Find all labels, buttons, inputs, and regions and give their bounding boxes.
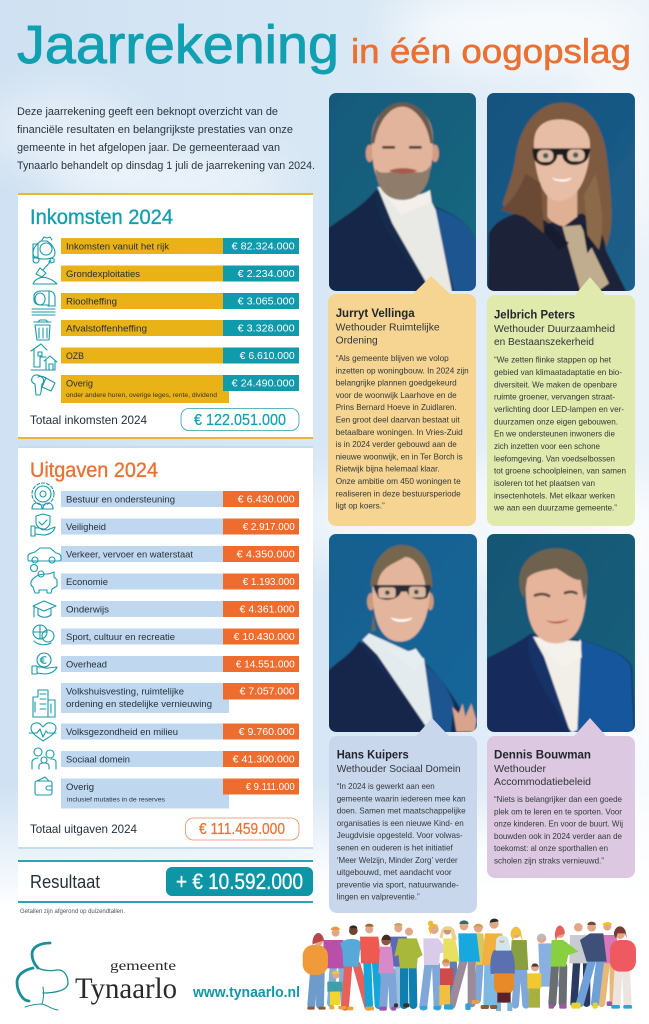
bar: onderwijs: € 4.361.000 (240, 604, 295, 616)
intro text: Tynaarlo behandelt op dinsdag 1 juli de jaarrekening van 2024. (17, 160, 315, 172)
card: Hans Kuipers: ‘Meer Welzijn, Minder Zorg’ verder (337, 855, 458, 865)
total inkomsten: € 122.051.000 (194, 412, 286, 429)
card: Hans Kuipers (329, 718, 477, 913)
bar: economie: € 1.193.000 (243, 577, 295, 588)
title: in één oogopslag (351, 33, 631, 71)
bar: overhead (61, 656, 299, 672)
title (17, 15, 631, 75)
card: Jurryt Vellinga: belangrijke plannen goedgekeurd (336, 378, 457, 388)
card: Hans Kuipers: uitgebouwd, met aandacht voor (337, 867, 452, 877)
icon: shovel (33, 258, 57, 284)
total inkomsten: Totaal inkomsten 2024 (30, 413, 147, 427)
bar: rioolheffing (61, 293, 299, 309)
bar: volksgezondheid (61, 724, 299, 740)
panel: resultaat: Resultaat (30, 872, 100, 892)
icon: apartment buildings (33, 690, 55, 717)
bar: bestuur (61, 491, 299, 507)
bar: ozb: OZB (66, 350, 84, 361)
icon: euro on hand (32, 653, 57, 674)
bar: economie: Economie (66, 576, 108, 587)
bar: volkshuisvesting: ordening en stedelijke vernieuwing (66, 698, 212, 709)
logo: gemeente Tynaarlo (17, 943, 177, 1010)
card: Jurryt Vellinga: Een groot deel daarvan bestaat uit (336, 414, 460, 424)
intro text: gemeente in het afgelopen jaar. De gemeenteraad van (17, 142, 280, 154)
icon: car (28, 548, 61, 563)
icon: keys (32, 375, 55, 395)
bar: sport (61, 628, 299, 644)
photo: Jurryt Vellinga (326, 90, 479, 297)
bar: rioolheffing: € 3.065.000 (238, 296, 295, 308)
card: Jurryt Vellinga: Onze ambitie om 450 woningen te (336, 476, 461, 486)
card: Dennis Bouwman: onze kinderen. En voor de buurt. Wij (494, 819, 623, 829)
bar: veiligheid (61, 518, 299, 534)
card: Jelbrich Peters: Jelbrich Peters (494, 308, 575, 322)
icon: sewer pipe (32, 291, 55, 315)
bar: sociaal domein: € 41.300.000 (233, 754, 295, 766)
bar: grondexploitaties (61, 266, 299, 282)
card: Hans Kuipers: senen en ouderen is het initiatief (337, 842, 453, 852)
bar: ozb: € 6.610.000 (240, 351, 295, 362)
bar: grondexploitaties: Grondexploitaties (66, 268, 140, 279)
card: Jurryt Vellinga: nieuwe woonwijk, en in Ter Borch is (336, 451, 463, 461)
bar: onderwijs: Onderwijs (66, 604, 109, 614)
bar: overig inkomsten: Overig (66, 378, 93, 388)
card: Hans Kuipers: “In 2024 is gewerkt aan een (337, 781, 435, 791)
bar: bestuur: € 6.430.000 (238, 494, 295, 506)
card: Hans Kuipers: Jeugdvisie opgesteld. Voor volwas- (337, 830, 463, 840)
card: Jelbrich Peters: Wethouder Duurzaamheid (494, 324, 615, 335)
bar: inkomsten vanuit het rijk: € 82.324.000 (232, 242, 295, 252)
icon: graduation cap (33, 601, 56, 617)
bar: volkshuisvesting: € 7.057.000 (240, 686, 295, 698)
title: Jaarrekening (17, 15, 339, 75)
card: Dennis Bouwman: scholen zijn straks vernieuwd.” (494, 856, 604, 866)
bar: verkeer (61, 546, 299, 562)
heading: inkomsten: Inkomsten 2024 (30, 206, 173, 229)
bar: volkshuisvesting: Volkshuisvesting, ruimtelijke (66, 686, 184, 696)
bar: verkeer: Verkeer, vervoer en waterstaat (66, 548, 193, 560)
card: Jelbrich Peters: En we ondersteunen inwoners die (494, 429, 615, 439)
icon: money bag (33, 237, 55, 263)
bar: overig uitgaven: € 9.111.000 (246, 782, 295, 793)
bar: sport: Sport, cultuur en recreatie (66, 631, 175, 642)
card: Jelbrich Peters: leefomgeving. Van voedselbossen (494, 453, 615, 463)
bar: onderwijs (61, 601, 299, 617)
total inkomsten (30, 408, 299, 430)
card: Jurryt Vellinga: betaalbare woningen. In Vries-Zuid (336, 427, 463, 437)
bar: overig uitgaven: inclusief mutaties in de reserves (67, 796, 165, 804)
bar: veiligheid: € 2.917.000 (243, 522, 295, 533)
icon: heart with pulse (29, 723, 56, 741)
footnote: Getallen zijn afgerond op duizendtallen. (20, 909, 125, 915)
bar: overhead: Overhead (66, 658, 107, 670)
bar: volksgezondheid: € 9.760.000 (239, 727, 295, 738)
total uitgaven: € 111.459.000 (199, 821, 285, 838)
card: Hans Kuipers: Wethouder Sociaal Domein (337, 764, 461, 775)
card: Dennis Bouwman: Accommodatiebeleid (494, 777, 591, 788)
bar: inkomsten vanuit het rijk: Inkomsten vanuit het rijk (66, 240, 169, 252)
bar: overig uitgaven: Overig (66, 781, 94, 792)
intro text (17, 106, 315, 172)
card: Dennis Bouwman: plek om te leren en te sporten. Voor (494, 806, 622, 816)
card: Jurryt Vellinga: Ordening (336, 336, 378, 346)
card: Jurryt Vellinga: Prins Bernard Hoeve in Zuidlaren. (336, 402, 457, 412)
bar: overig uitgaven (61, 778, 299, 808)
icon: hand with shield (31, 514, 55, 536)
illustration: crowd of people (303, 919, 636, 1011)
card: Jelbrich Peters: duurzamen onze eigen gebouwen. (494, 416, 618, 426)
card: Hans Kuipers: lingen en valpreventie.” (337, 892, 420, 902)
bar: overig inkomsten: € 24.490.000 (232, 378, 295, 390)
icon: family (32, 748, 56, 769)
bar: overig inkomsten (61, 375, 299, 403)
website url: www.tynaarlo.nl (192, 985, 300, 1001)
photo: Hans Kuipers (326, 530, 479, 742)
icon: sport balls (33, 625, 54, 645)
bar: grondexploitaties: € 2.234.000 (238, 269, 295, 280)
intro text: financiële resultaten en belangrijkste prestaties van onze (17, 124, 293, 136)
bar: verkeer: € 4.350.000 (237, 550, 295, 560)
icon: houses (31, 344, 57, 370)
intro text: Deze jaarrekening geeft een beknopt overzicht van de (17, 106, 278, 118)
bar: overhead: € 14.551.000 (236, 660, 295, 670)
card: Dennis Bouwman (487, 718, 635, 878)
card: Jelbrich Peters: en Bestaanszekerheid (494, 337, 594, 348)
card: Hans Kuipers: preventie via sport, natuurwande- (337, 879, 459, 889)
card: Hans Kuipers: organisaties is een nieuwe Kind- en (337, 818, 464, 828)
logo: gemeente Tynaarlo: gemeente (110, 959, 176, 974)
card: Hans Kuipers: Hans Kuipers (337, 748, 409, 762)
card: Dennis Bouwman: bouwden ook in 2024 verder aan de (494, 831, 622, 841)
card: Jurryt Vellinga: ligt op koers.” (336, 501, 385, 511)
card: Jurryt Vellinga: voor de woonwijk Laarhove en de (336, 390, 457, 400)
icon: gear and people (32, 483, 54, 509)
panel: resultaat (18, 860, 313, 903)
logo: gemeente Tynaarlo: Tynaarlo (75, 972, 177, 1005)
card: Jelbrich Peters: insectenhotels. Met elkaar werken (494, 490, 615, 500)
card: Jelbrich Peters: we aan een duurzame gemeente.” (493, 503, 617, 513)
card: Jelbrich Peters: diversiteit. We maken de openbare (494, 379, 617, 389)
card: Dennis Bouwman: Dennis Bouwman (494, 748, 591, 762)
card: Jurryt Vellinga: Jurryt Vellinga (336, 307, 415, 320)
card: Jurryt Vellinga: inzetten op woningbouw. In 2024 zijn (336, 365, 469, 375)
card: Jelbrich Peters: gebied van klimaatadaptatie en bio- (494, 367, 622, 377)
card: Jelbrich Peters: isoleren tot het plaatsen van (494, 478, 595, 488)
bar: bestuur: Bestuur en ondersteuning (66, 494, 175, 504)
card: Hans Kuipers: gemeente waarin iedereen mee kan (337, 793, 466, 803)
bar: volkshuisvesting (61, 683, 299, 713)
photo: Dennis Bouwman (486, 530, 636, 737)
icon: wallet (35, 777, 52, 795)
card: Jelbrich Peters: ruimte groener, vervangen straat- (494, 392, 615, 402)
card: Jelbrich Peters: tot groene schoolpleinen, van samen (494, 466, 626, 476)
result value: + € 10.592.000 (176, 869, 303, 894)
bar: veiligheid: Veiligheid (66, 521, 106, 532)
card: Jurryt Vellinga: Rietwijk bijna helemaal klaar. (336, 464, 440, 474)
bar: afvalstoffenheffing: € 3.328.000 (238, 324, 295, 334)
card: Dennis Bouwman: Wethouder (494, 764, 547, 775)
bar: economie (61, 574, 299, 590)
total uitgaven: Totaal uitgaven 2024 (30, 822, 137, 836)
bar: rioolheffing: Rioolheffing (66, 296, 117, 306)
card: Dennis Bouwman: “Niets is belangrijker dan een goede (494, 794, 622, 804)
card: Jurryt Vellinga (328, 276, 476, 526)
icon: tree (17, 943, 68, 1010)
card: Jelbrich Peters: zich inzetten voor een schone (494, 441, 600, 451)
bar: sociaal domein: Sociaal domein (66, 754, 130, 764)
bar: sociaal domein (61, 751, 299, 767)
icon: piggy bank (30, 564, 57, 593)
card: Jurryt Vellinga: realiseren in deze bestuursperiode (336, 488, 461, 498)
card: Jelbrich Peters: verlichting door LED-lampen en ver- (494, 404, 624, 414)
card: Jurryt Vellinga: is in 2024 verder gebouwd aan de (336, 439, 457, 449)
card: Jelbrich Peters (487, 277, 635, 526)
total uitgaven (30, 818, 299, 840)
bar: overig inkomsten: onder andere huren, overige leges, rente, dividend (66, 392, 218, 399)
bar: ozb (61, 348, 299, 364)
card: Jelbrich Peters: “We zetten flinke stappen op het (494, 355, 612, 365)
card: Jurryt Vellinga: Wethouder Ruimtelijke (336, 322, 440, 334)
card: Jurryt Vellinga: “Als gemeente blijven we volop (336, 353, 449, 363)
heading: uitgaven: Uitgaven 2024 (30, 459, 158, 482)
panel: inkomsten (18, 193, 313, 439)
bar: volksgezondheid: Volksgezondheid en milieu (66, 726, 178, 737)
icon: waste bin (34, 320, 51, 340)
bar: sport: € 10.430.000 (234, 632, 295, 643)
bar: inkomsten vanuit het rijk (61, 238, 299, 254)
panel: uitgaven (18, 446, 313, 849)
bar: afvalstoffenheffing: Afvalstoffenheffing (66, 322, 147, 334)
photo: Jelbrich Peters (486, 90, 636, 303)
bar: afvalstoffenheffing (61, 320, 299, 336)
card: Dennis Bouwman: toekomst: al onze sporthallen en (494, 843, 608, 853)
card: Hans Kuipers: doen. Samen met maatschappelijke (337, 806, 466, 816)
